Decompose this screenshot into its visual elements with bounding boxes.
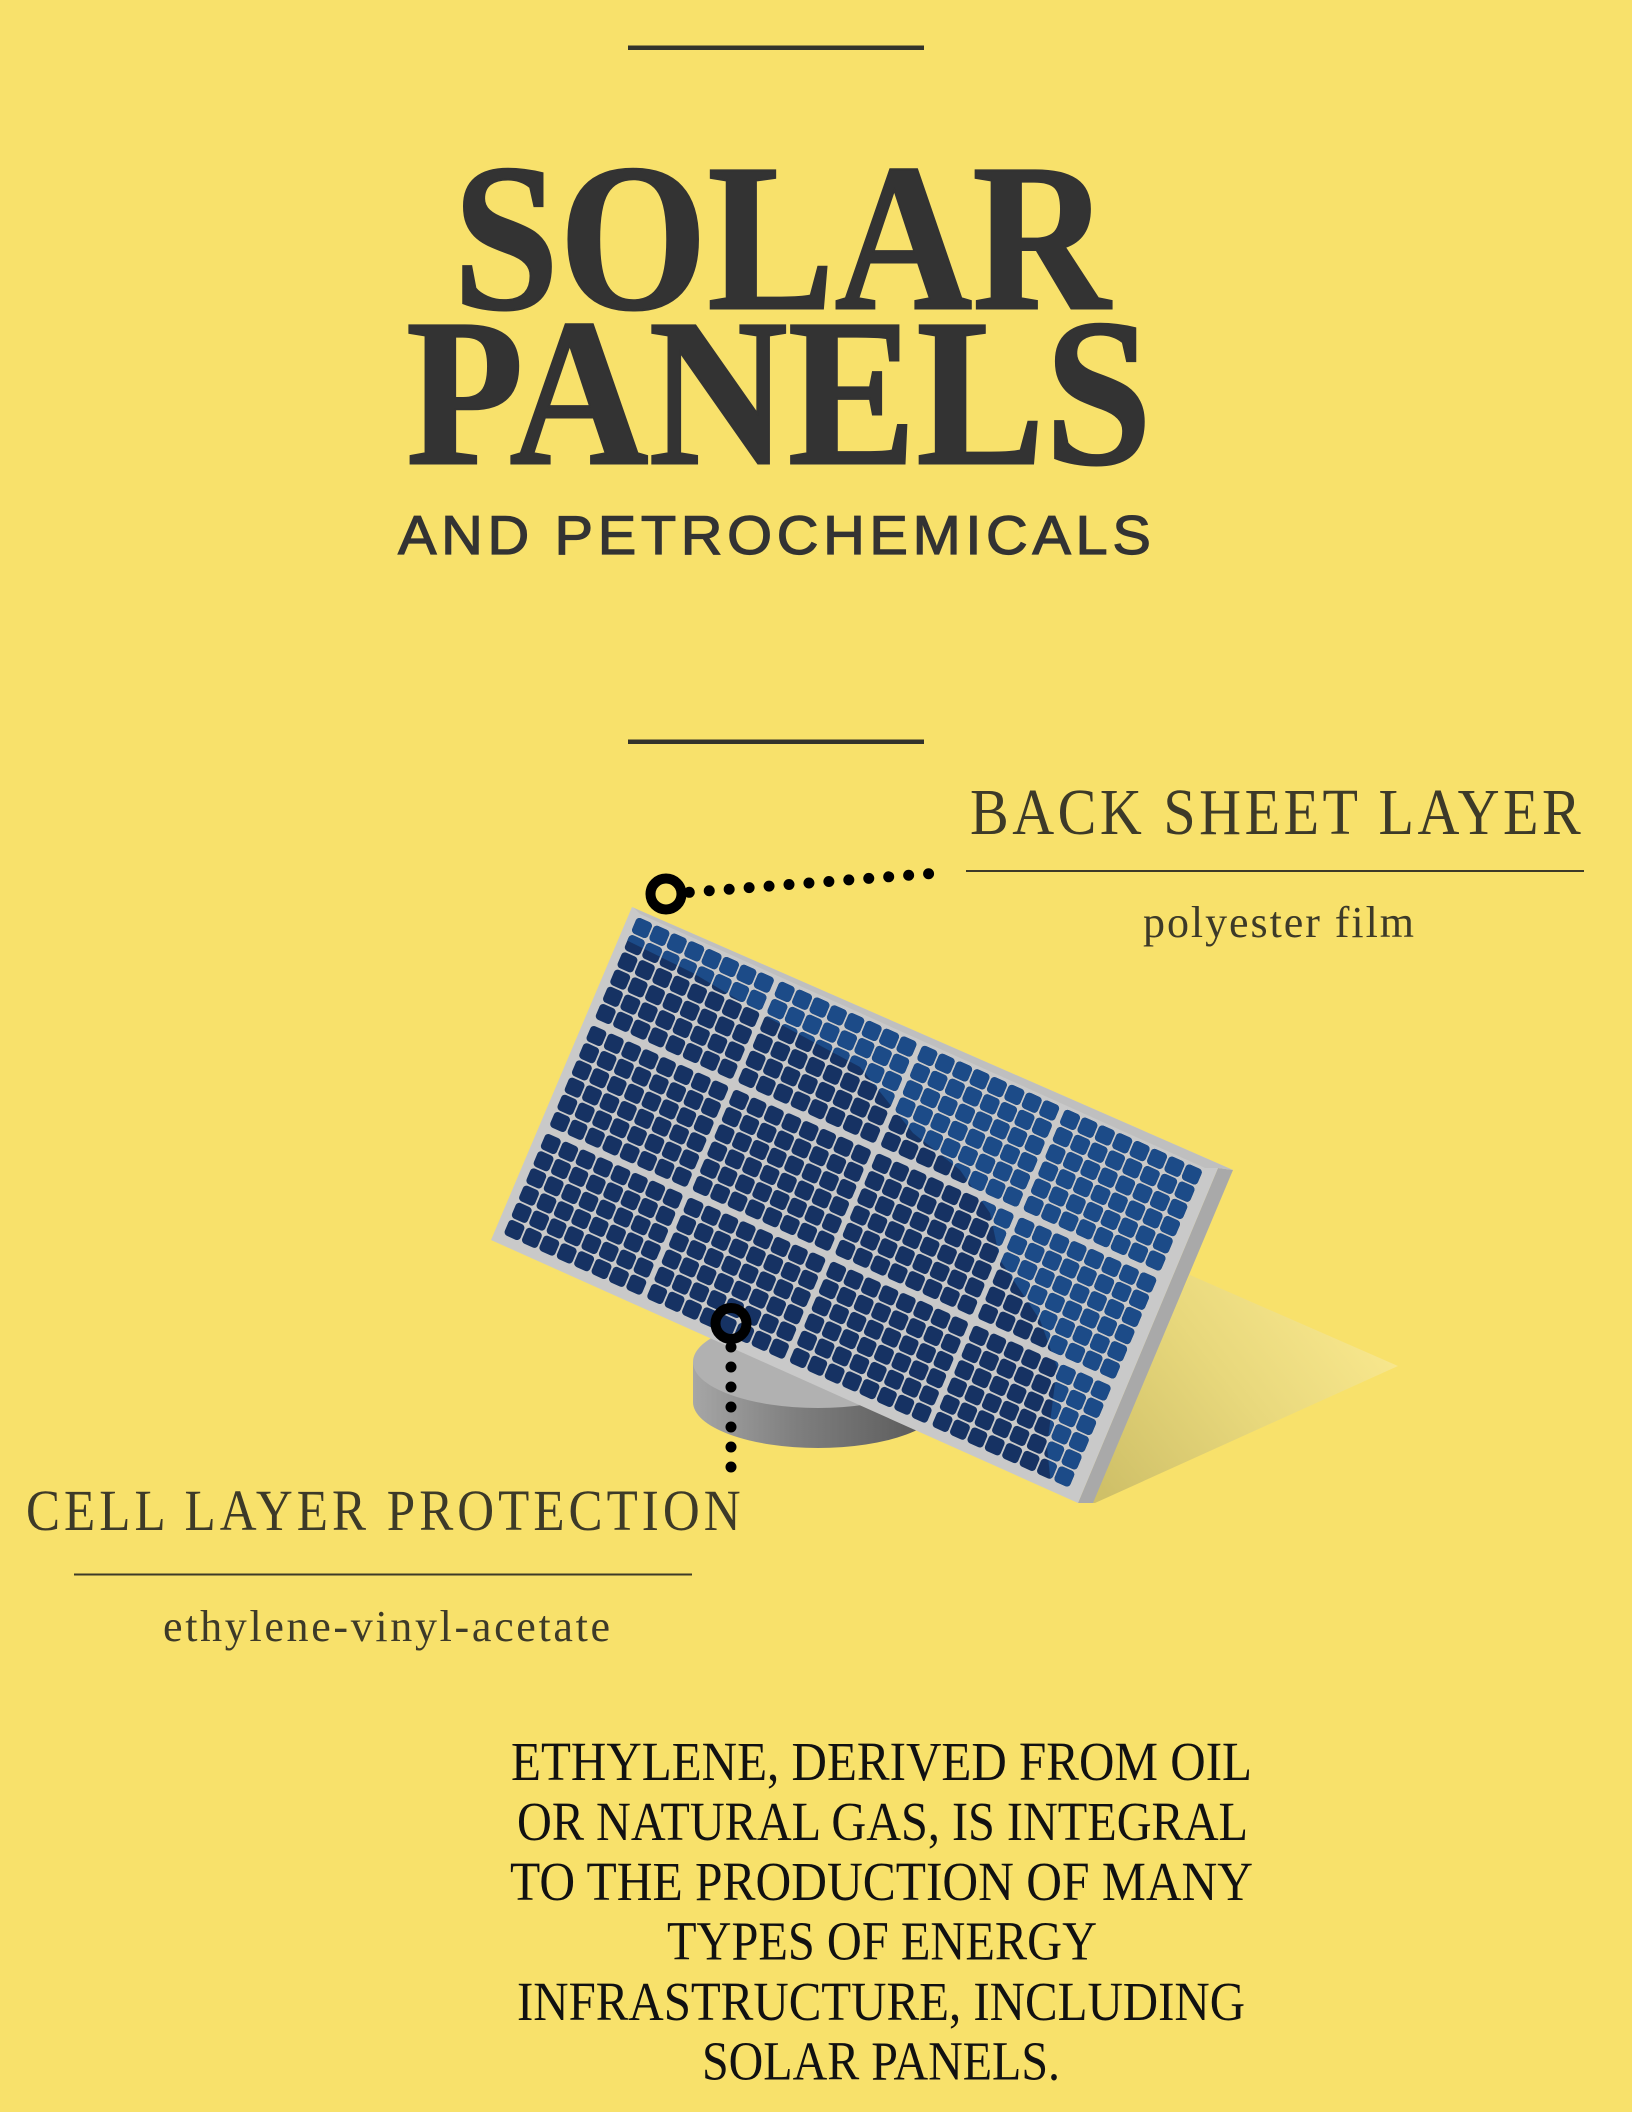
body text: SOLAR PANELS. bbox=[702, 2030, 1060, 2092]
panel shadow bbox=[1080, 1275, 1398, 1503]
callout: cell layer pointer bbox=[716, 1308, 746, 1468]
callout: back sheet pointer bbox=[650, 874, 930, 910]
body text bbox=[510, 1731, 1253, 2092]
label: cell layer protection bbox=[26, 1478, 741, 1651]
body text: INFRASTRUCTURE, INCLUDING bbox=[517, 1971, 1245, 2032]
body text: TO THE PRODUCTION OF MANY bbox=[510, 1851, 1253, 1912]
pedestal bbox=[693, 1316, 943, 1448]
lower divider bbox=[628, 740, 924, 744]
label: back sheet layer bbox=[966, 777, 1584, 947]
title: SOLAR bbox=[453, 120, 1112, 354]
label: back sheet layer: BACK SHEET LAYER bbox=[970, 777, 1581, 849]
label: cell layer protection: ethylene-vinyl-acetate bbox=[163, 1602, 610, 1651]
panel frame bbox=[491, 907, 1233, 1503]
body text: ETHYLENE, DERIVED FROM OIL bbox=[511, 1731, 1252, 1792]
subtitle: AND PETROCHEMICALS bbox=[398, 504, 1151, 566]
body text: TYPES OF ENERGY bbox=[667, 1910, 1097, 1972]
top divider bbox=[628, 46, 924, 50]
body text: OR NATURAL GAS, IS INTEGRAL bbox=[517, 1791, 1248, 1852]
label: cell layer protection: CELL LAYER PROTECTION bbox=[26, 1478, 741, 1543]
title bbox=[406, 120, 1152, 510]
illustration: solar panel bbox=[491, 907, 1398, 1503]
label: back sheet layer: polyester film bbox=[1143, 898, 1414, 947]
title: PANELS bbox=[406, 276, 1152, 510]
solar cells bbox=[503, 917, 1203, 1488]
